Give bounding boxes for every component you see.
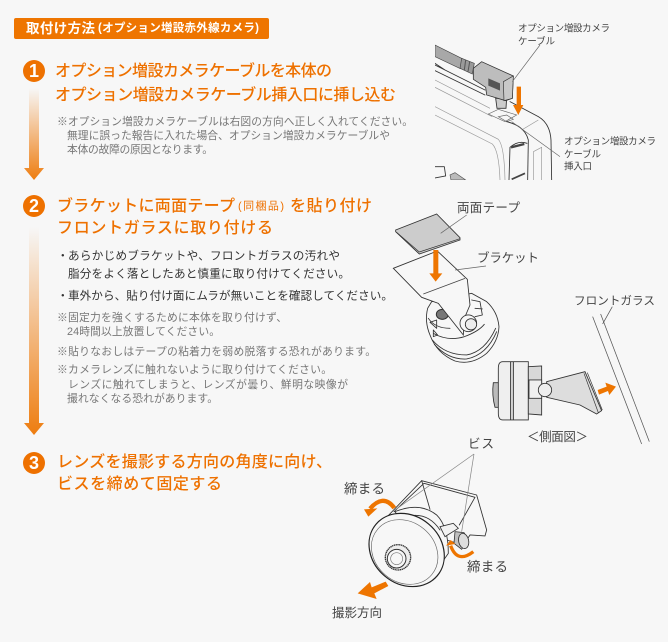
label: double-sided tape: 両面テープ: [457, 201, 520, 215]
title: 取付け方法: [26, 20, 96, 36]
label: camera cable: [518, 22, 610, 48]
step 2 notes: ※固定力を強くするために本体を取り付けず、: [57, 310, 287, 324]
step 2 heading: [57, 196, 372, 237]
label: shooting direction: 撮影方向: [332, 605, 382, 620]
label: cable port: オプション増設カメラ: [564, 136, 656, 148]
label: bracket: ブラケット: [477, 250, 539, 265]
step 3 heading: ビスを締めて固定する: [57, 475, 222, 493]
illustration: bracket and camera: [393, 214, 649, 444]
step 2 heading: (同梱品): [238, 198, 284, 212]
step 1 number: 1: [29, 61, 39, 81]
label: cable port: ケーブル: [564, 148, 601, 160]
step 2 notes: 撮れなくなる恐れがあります。: [67, 391, 218, 405]
step 1 note: ※オプション増設カメラケーブルは右図の方向へ正しく入れてください。: [57, 114, 413, 128]
label: windshield: フロントガラス: [574, 294, 655, 308]
label: cable port: 挿入口: [564, 160, 592, 172]
step 2 instructions: ・: [57, 290, 69, 302]
step 2 number: [23, 195, 45, 217]
step 1 heading: オプション増設カメラケーブルを本体の: [55, 61, 332, 80]
arrow: step 2 to step 3: [24, 227, 44, 435]
step 1 number: [23, 60, 45, 82]
step 2 notes: ※貼りなおしはテープの粘着力を弱め脱落する恐れがあります。: [57, 344, 376, 358]
step 1 heading: [55, 61, 396, 104]
title: (オプション増設赤外線カメラ): [98, 20, 259, 34]
step 2 heading: ブラケットに両面テープ: [57, 196, 235, 215]
label: camera cable: ケーブル: [518, 36, 555, 48]
step 2 notes: レンズに触れてしまうと、レンズが曇り、鮮明な映像が: [68, 377, 348, 391]
label: tighten right: 締まる: [467, 560, 508, 574]
step 2 instructions: [57, 248, 393, 302]
label: screws: ビス: [468, 437, 494, 451]
step 2 instructions: あらかじめブラケットや、フロントガラスの汚れや: [68, 248, 340, 262]
step 1 note: 本体の故障の原因となります。: [67, 142, 213, 156]
step 2 instructions: 車外から、貼り付け面にムラが無いことを確認してください。: [68, 288, 393, 302]
step 2 instructions: 脂分をよく落としたあと慎重に取り付けてください。: [68, 266, 350, 280]
step 3 heading: [57, 452, 332, 493]
step 2 notes: ※カメラレンズに触れないように取り付けてください。: [57, 362, 332, 376]
illustration: cable insertion: [435, 45, 560, 180]
label: tighten left: 締まる: [344, 482, 385, 496]
label: cable port: [564, 136, 656, 172]
step 2 notes: 24時間以上放置してください。: [67, 324, 220, 338]
label: camera cable: オプション増設カメラ: [518, 22, 610, 34]
step 2 number: 2: [29, 196, 39, 216]
step 3 heading: レンズを撮影する方向の角度に向け、: [57, 452, 332, 471]
step 2 notes: [57, 310, 376, 405]
arrow: step 1 to step 2: [24, 88, 44, 180]
title: [14, 18, 269, 39]
step 3 number: [23, 452, 45, 474]
step 2 heading: を貼り付け: [290, 197, 372, 215]
step 3 number: 3: [29, 453, 39, 473]
step 1 note: 無理に誤った報告に入れた場合、オプション増設カメラケーブルや: [67, 128, 390, 142]
step 2 instructions: ・: [57, 250, 69, 262]
illustration: camera angle adjustment: [354, 454, 487, 602]
step 1 note: [57, 114, 413, 156]
step 2 heading: フロントガラスに取り付ける: [57, 219, 273, 237]
label: side view: ＜側面図＞: [527, 430, 588, 444]
step 1 heading: オプション増設カメラケーブル挿入口に挿し込む: [55, 85, 396, 104]
